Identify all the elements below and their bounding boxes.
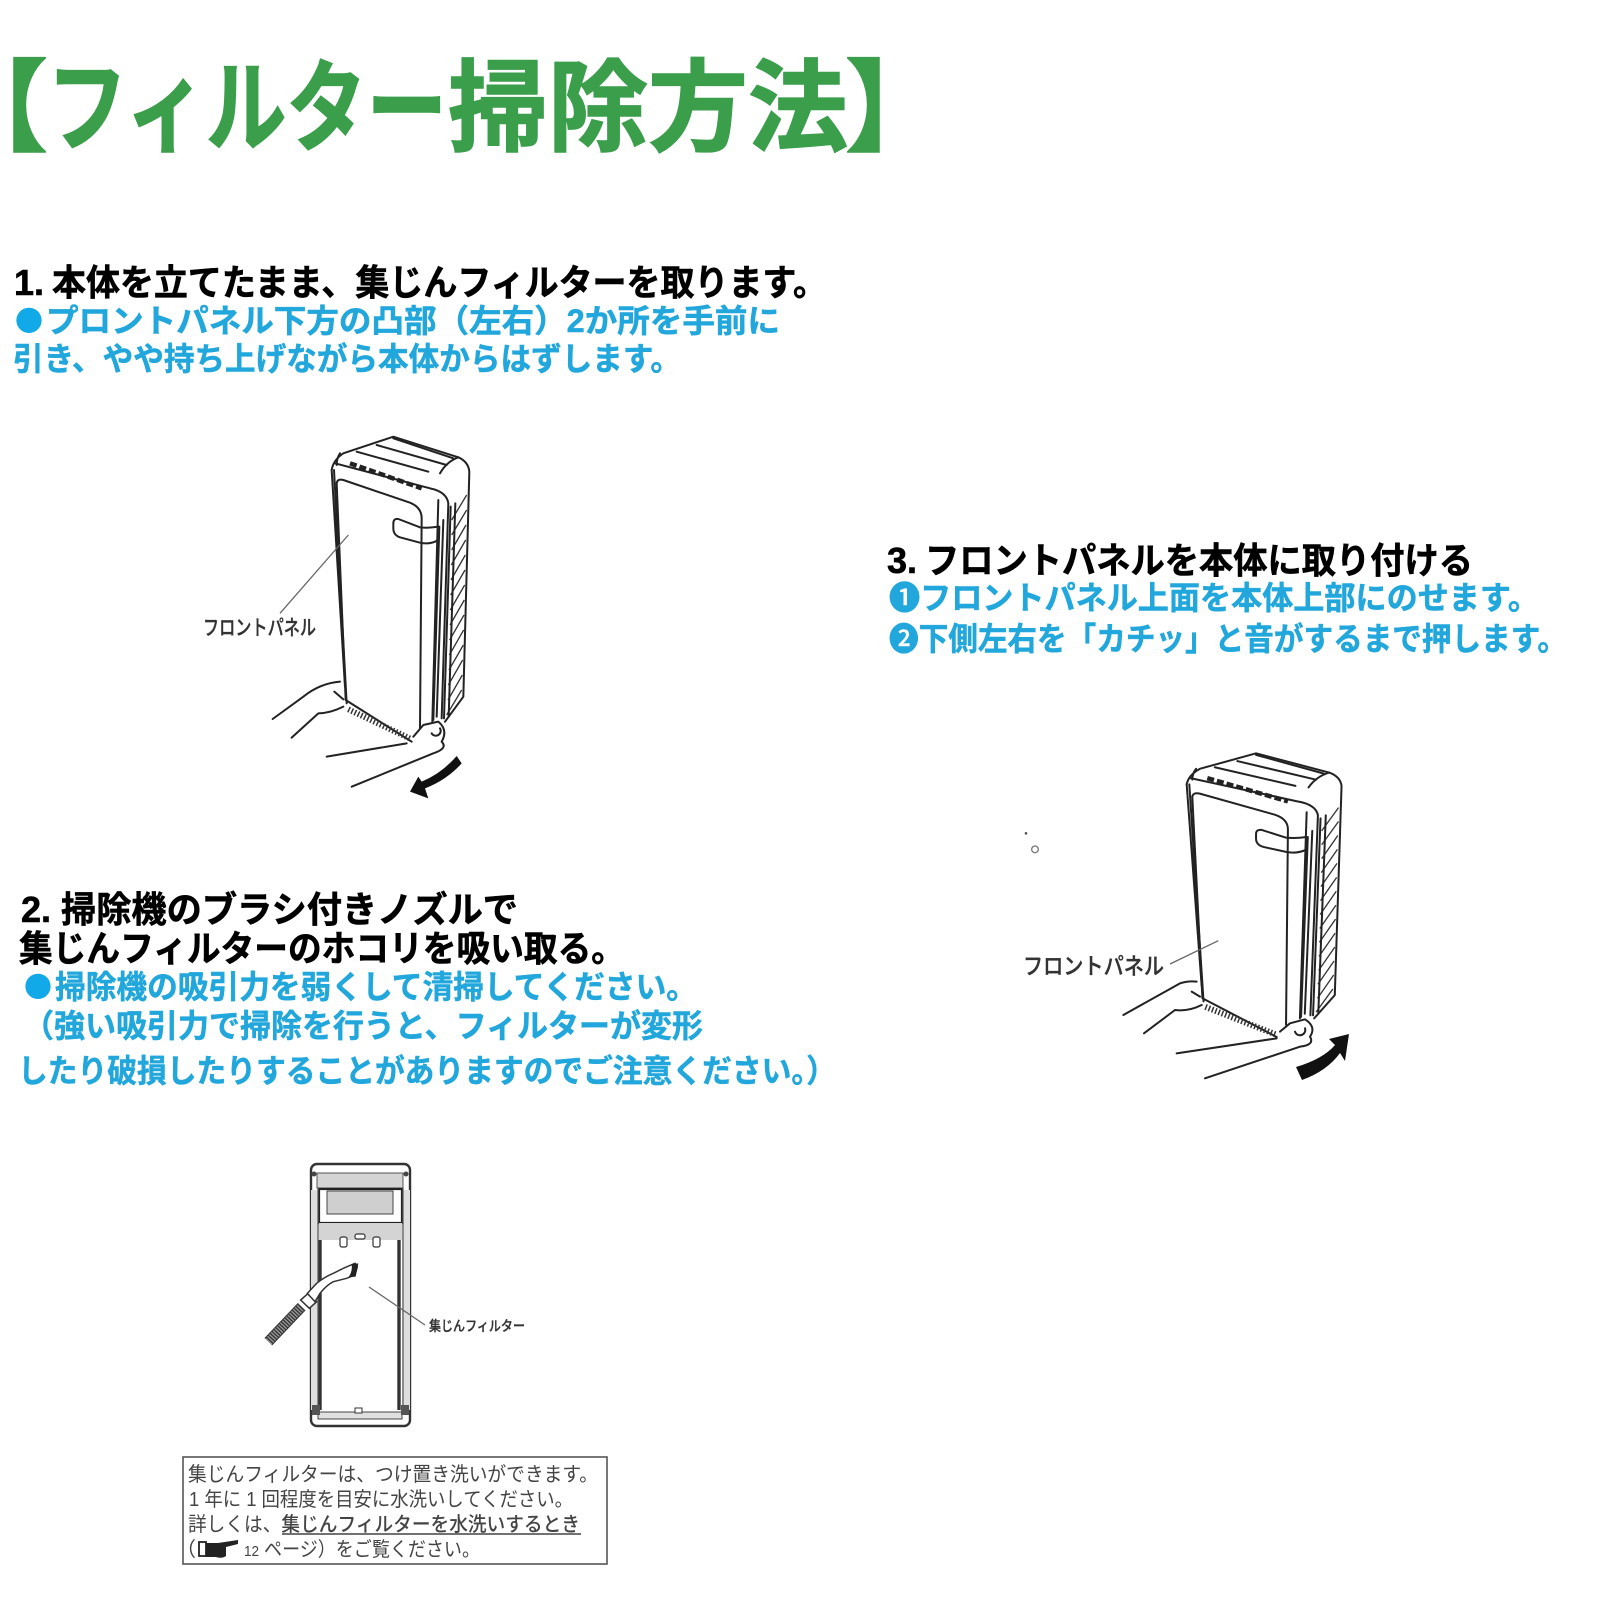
icon: pointing hand — [199, 1540, 238, 1558]
note box — [176, 1457, 607, 1564]
leader line — [1170, 941, 1218, 964]
title: フィルター — [47, 53, 447, 165]
leader line — [280, 535, 348, 613]
note box: 12 ページ）をご覧ください。 — [244, 1538, 480, 1561]
hands — [273, 682, 444, 787]
title: 】 — [845, 53, 945, 165]
illustration: removing front panel: フロントパネル — [203, 617, 316, 640]
title: 掃除方法 — [448, 53, 848, 165]
step 3 text block: 3. — [887, 540, 917, 581]
step 3 text block: ❶フロントパネル上面を本体上部にのせます。 — [889, 580, 1539, 616]
step 2 text block: （強い吸引力で掃除を行うと、フィルターが変形 — [23, 1008, 703, 1044]
step 2 text block: 集じんフィルターのホコリを吸い取る。 — [19, 928, 625, 969]
label: フロントパネル — [1023, 953, 1164, 979]
step 1 text block: プロントパネル下方の凸部（左右）2か所を手前に — [46, 303, 780, 339]
filter unit — [311, 1164, 410, 1426]
step 1 text block: 引き、やや持ち上げながら本体からはずします。 — [13, 341, 681, 377]
leader line — [369, 1287, 425, 1325]
step 2 text block: したり破損したりすることがありますのでご注意ください。） — [18, 1053, 836, 1089]
title — [0, 53, 945, 165]
step 2 text block: 掃除機の吸引力を弱くして清掃してください。 — [55, 969, 697, 1005]
illustration: reattaching front panel — [1023, 753, 1349, 1080]
step 1 text block: ● — [15, 300, 43, 340]
arrow — [1296, 1034, 1349, 1080]
note box: （ — [176, 1538, 196, 1561]
step 1 text block — [13, 262, 827, 377]
step 3 text block: フロントパネルを本体に取り付ける — [925, 540, 1473, 581]
step 2 text block: 掃除機のブラシ付きノズルで — [61, 889, 518, 930]
step 2 text block: ● — [24, 966, 52, 1006]
step 2 text block: 2. — [21, 889, 51, 930]
illustration: removing front panel — [203, 437, 469, 798]
step 1 text block: 本体を立てたまま、集じんフィルターを取ります。 — [52, 262, 827, 303]
step 1 text block: 1. — [14, 262, 44, 303]
hands — [1123, 981, 1312, 1078]
step 3 text block — [887, 540, 1567, 657]
note box: 集じんフィルターは、つけ置き洗いができます。 — [188, 1463, 598, 1486]
stray marks — [1025, 832, 1027, 835]
arrow — [410, 756, 462, 798]
step 3 text block: ❷下側左右を「カチッ」と音がするまで押します。 — [889, 621, 1567, 657]
note box: 詳しくは、集じんフィルターを水洗いするとき — [188, 1513, 580, 1536]
step 2 text block — [18, 889, 836, 1089]
vacuum nozzle — [268, 1263, 358, 1342]
illustration: vacuuming filter — [268, 1164, 525, 1426]
label: 集じんフィルター — [429, 1318, 525, 1334]
note box: 1 年に 1 回程度を目安に水洗いしてください。 — [189, 1488, 573, 1511]
